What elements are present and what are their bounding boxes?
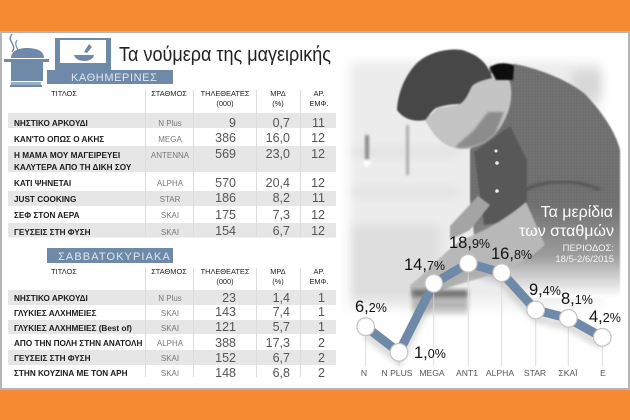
- row: [14, 208, 325, 222]
- value labels: 18,9%: [449, 234, 490, 252]
- line chart: station shares: [355, 234, 621, 378]
- man: collar: [490, 63, 514, 80]
- value labels: 16,8%: [491, 245, 532, 263]
- row: 7,4: [273, 305, 290, 319]
- row: ΣΤΗΝ ΚΟΥΖΙΝΑ ΜΕ ΤΟΝ ΑΡΗ: [14, 369, 128, 378]
- row: JUST COOKING: [14, 195, 76, 204]
- axis labels: MEGA: [419, 368, 445, 378]
- food plate: [412, 290, 468, 316]
- axis labels: N PLUS: [381, 368, 413, 378]
- row: [14, 366, 325, 380]
- value labels: 9,4%: [529, 281, 561, 299]
- row: 1: [318, 305, 325, 319]
- row: STAR: [160, 195, 181, 204]
- row: [14, 147, 325, 172]
- row: [14, 224, 325, 238]
- row: ΓΕΥΣΕΙΣ ΣΤΗ ΦΥΣΗ: [14, 354, 91, 363]
- row: 2: [318, 351, 325, 365]
- header row: (000): [216, 99, 234, 108]
- row: 12: [311, 147, 325, 161]
- header row: [51, 267, 329, 286]
- row: 12: [311, 224, 325, 238]
- row: 1: [318, 291, 325, 305]
- jacket sleeve fold: [525, 182, 600, 190]
- header row: ΣΤΑΘΜΟΣ: [151, 267, 187, 276]
- row: 569: [215, 147, 236, 161]
- man: jacket: [470, 64, 620, 298]
- row: 152: [215, 351, 236, 365]
- header row: ΑΡ.: [314, 267, 324, 276]
- row: 11: [312, 116, 325, 130]
- row: ΑΠΟ ΤΗΝ ΠΟΛΗ ΣΤΗΝ ΑΝΑΤΟΛΗ: [14, 339, 143, 348]
- value labels: 8,1%: [561, 290, 593, 308]
- row: 186: [215, 191, 236, 205]
- row: SKAI: [161, 228, 179, 237]
- header row: ΤΙΤΛΟΣ: [51, 267, 77, 276]
- chart heading: των σταθμών: [519, 223, 614, 240]
- row: [14, 176, 325, 190]
- row: ΓΛΥΚΙΕΣ ΑΛΧΗΜΕΙΕΣ: [14, 309, 97, 318]
- row: MEGA: [158, 135, 182, 144]
- axis labels: ANT1: [456, 368, 478, 378]
- photo fade to white: [346, 292, 626, 320]
- row: ΚΑΛΥΤΕΡΑ ΑΠΟ ΤΗ ΔΙΚΗ ΣΟΥ: [14, 163, 132, 172]
- wall fixtures: [364, 125, 409, 175]
- title: Τα νούμερα της μαγειρικής: [119, 44, 331, 66]
- row: 1: [318, 320, 325, 334]
- man: hair: [397, 50, 492, 121]
- header row: (000): [216, 277, 234, 286]
- line shadow: [366, 271, 602, 360]
- header row: ΜΡΔ: [270, 89, 286, 98]
- points: [357, 254, 611, 361]
- value labels: 4,2%: [589, 308, 621, 326]
- row: [14, 320, 325, 334]
- band: weekdays: ΚΑΘΗΜΕΡΙΝΕΣ: [71, 72, 158, 84]
- row: 175: [215, 208, 236, 222]
- row: ALPHA: [157, 339, 184, 348]
- chart heading: ΠΕΡΙΟΔΟΣ:: [563, 243, 614, 254]
- row: 16,0: [266, 131, 290, 145]
- axis labels: E: [600, 368, 606, 378]
- value labels: 1,0%: [414, 344, 446, 362]
- axis labels: ΣΚΑΪ: [558, 368, 578, 378]
- header row: ΤΗΛΕΘΕΑΤΕΣ: [201, 89, 250, 98]
- photo: chef cooking: [347, 48, 621, 316]
- man: beard: [455, 112, 504, 148]
- man: face: [425, 72, 511, 149]
- row: 148: [215, 366, 236, 380]
- icon: monitor with bowl: [55, 38, 111, 70]
- icon: pot on stove: [4, 34, 49, 87]
- row: 12: [311, 176, 325, 190]
- row: ΚΑΤΙ ΨΗΝΕΤΑΙ: [14, 179, 71, 188]
- band: weekends: ΣΑΒΒΑΤΟΚΥΡΙΑΚΑ: [58, 251, 171, 263]
- row: 2: [318, 366, 325, 380]
- row: 5,7: [273, 320, 290, 334]
- row: ΝΗΣΤΙΚΟ ΑΡΚΟΥΔΙ: [14, 119, 88, 128]
- row: [14, 131, 325, 145]
- header row: ΤΗΛΕΘΕΑΤΕΣ: [201, 267, 250, 276]
- row: 7,3: [273, 208, 290, 222]
- header row: ΣΤΑΘΜΟΣ: [151, 89, 187, 98]
- row: 17,3: [266, 336, 290, 350]
- row: SKAI: [161, 369, 179, 378]
- row: 12: [311, 131, 325, 145]
- row: [14, 336, 325, 350]
- chart heading: 18/5-2/6/2015: [555, 254, 614, 265]
- man: hand: [450, 196, 490, 240]
- row: [14, 351, 325, 365]
- row: ΓΛΥΚΙΕΣ ΑΛΧΗΜΕΙΕΣ (Best of): [14, 324, 132, 333]
- axis labels: ALPHA: [486, 368, 514, 378]
- row: 143: [215, 305, 236, 319]
- row: ΓΕΥΣΕΙΣ ΣΤΗ ΦΥΣΗ: [14, 228, 91, 237]
- row: ALPHA: [157, 179, 184, 188]
- table: weekends: [8, 267, 336, 380]
- row: N Plus: [158, 119, 182, 128]
- row: 23: [222, 291, 236, 305]
- value labels: 14,7%: [404, 256, 445, 274]
- row: SKAI: [161, 309, 179, 318]
- row: ΝΗΣΤΙΚΟ ΑΡΚΟΥΔΙ: [14, 294, 88, 303]
- line: [366, 263, 602, 352]
- header row: (%): [272, 277, 284, 286]
- row: 2: [318, 336, 325, 350]
- row: 1,4: [273, 291, 290, 305]
- row: 121: [215, 320, 236, 334]
- shirt buttons: [494, 150, 499, 193]
- row: [14, 116, 325, 130]
- header row: ΕΜΦ.: [309, 277, 329, 286]
- row: ANTENNA: [151, 151, 190, 160]
- row: [14, 191, 325, 205]
- header row: (%): [272, 99, 284, 108]
- header row: [51, 89, 329, 108]
- row: Η ΜΑΜΑ ΜΟΥ ΜΑΓΕΙΡΕΥΕΙ: [14, 151, 120, 160]
- header row: ΤΙΤΛΟΣ: [51, 89, 77, 98]
- row: ΚΑΝ'ΤΟ ΟΠΩΣ Ο ΑΚΗΣ: [14, 135, 104, 144]
- value labels: [355, 234, 621, 362]
- value labels: 6,2%: [355, 298, 387, 316]
- row: 0,7: [273, 116, 290, 130]
- row: 23,0: [266, 147, 290, 161]
- row: ΣΕΦ ΣΤΟΝ ΑΕΡΑ: [14, 211, 80, 220]
- table: weekdays: [8, 89, 336, 238]
- row: 388: [215, 336, 236, 350]
- row: 20,4: [266, 176, 290, 190]
- row: 6,7: [273, 351, 290, 365]
- row: 12: [311, 208, 325, 222]
- row: [14, 305, 325, 319]
- row: 386: [215, 131, 236, 145]
- row: N Plus: [158, 294, 182, 303]
- header row: ΜΡΔ: [270, 267, 286, 276]
- photo background: blurred brick wall: [350, 62, 602, 312]
- axis labels: N: [361, 368, 367, 378]
- man: shirt: [474, 126, 527, 225]
- row: SKAI: [161, 324, 179, 333]
- row: [14, 291, 325, 305]
- row: 570: [215, 176, 236, 190]
- row: SKAI: [161, 354, 179, 363]
- row: 154: [215, 224, 236, 238]
- row: 9: [229, 116, 236, 130]
- row: 6,7: [273, 224, 290, 238]
- man: tattooed forearm: [410, 202, 545, 300]
- band: weekdays: [47, 70, 173, 84]
- row: SKAI: [161, 211, 179, 220]
- axis labels: [361, 368, 606, 378]
- header row: ΑΡ.: [314, 89, 324, 98]
- chart heading: [519, 204, 614, 265]
- row: 11: [312, 191, 325, 205]
- header row: ΕΜΦ.: [309, 99, 329, 108]
- row: 8,2: [273, 191, 290, 205]
- chart heading: Τα μερίδια: [541, 204, 613, 221]
- row: 6,8: [273, 366, 290, 380]
- axis labels: STAR: [524, 368, 546, 378]
